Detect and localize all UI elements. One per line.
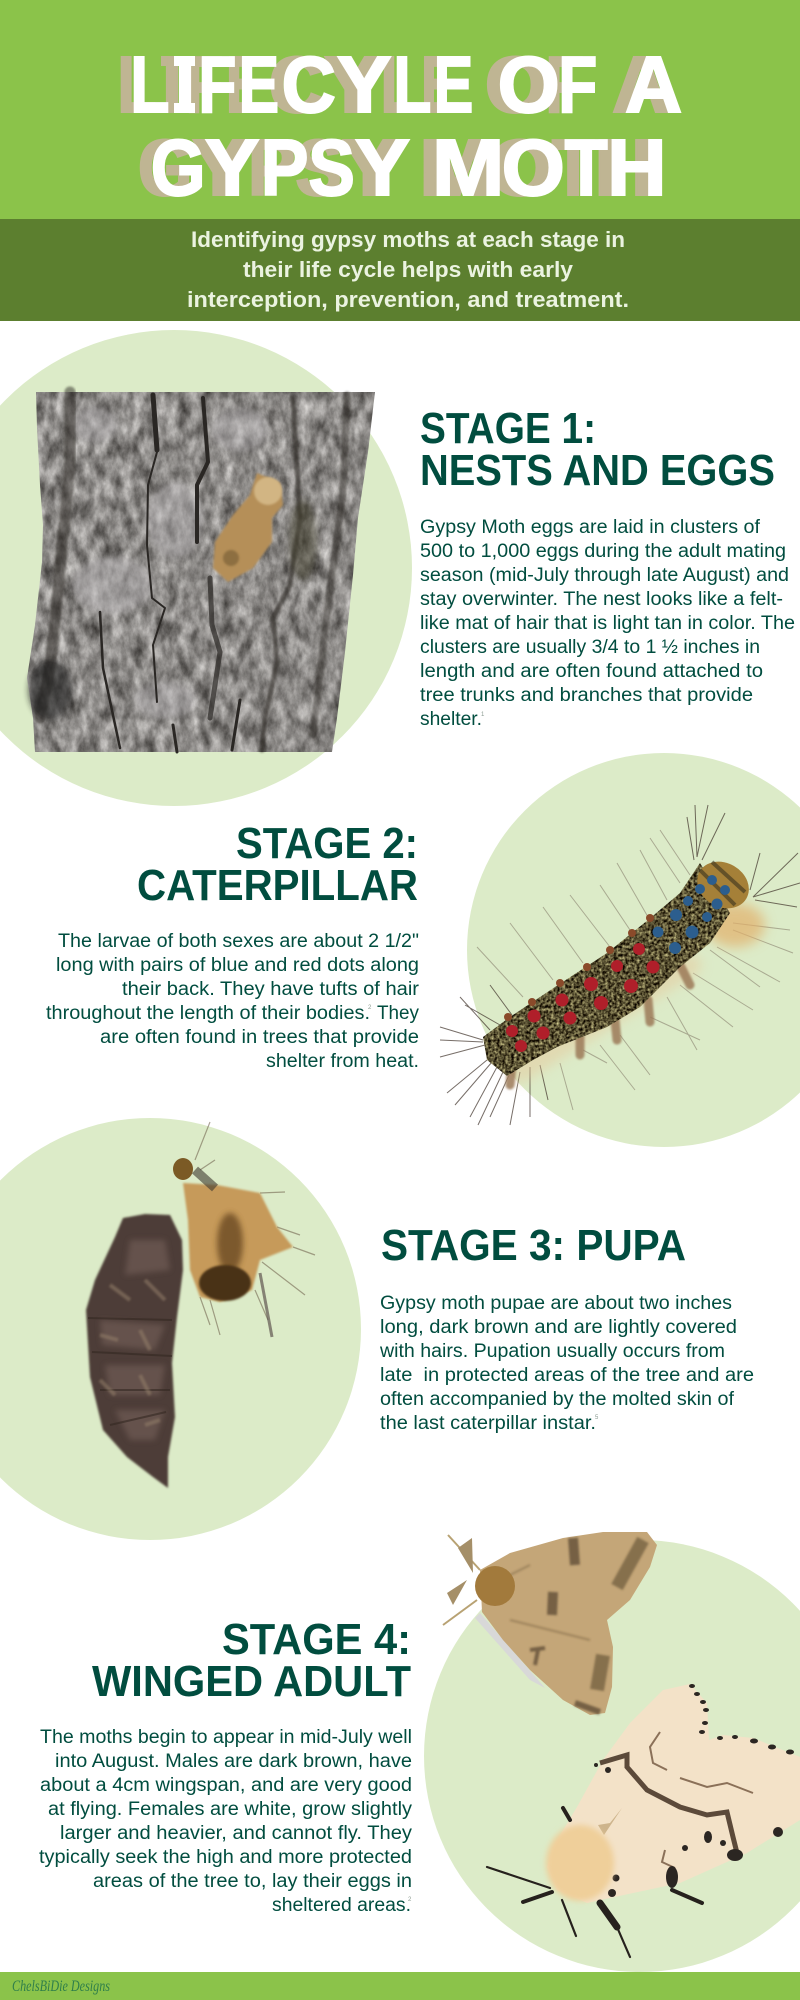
stage 2 heading: CATERPILLAR bbox=[137, 861, 418, 910]
title: A bbox=[625, 40, 682, 129]
pupa body bbox=[86, 1214, 183, 1488]
title: E bbox=[239, 40, 279, 129]
title: L bbox=[117, 40, 156, 129]
stage 2 text: 2 bbox=[368, 1005, 372, 1011]
stage 1 circle bbox=[0, 330, 412, 806]
stage 1 text: clusters are usually 3/4 to 1 ½ inches in bbox=[420, 637, 760, 658]
caterpillar head bbox=[689, 852, 757, 918]
photo: brown male moth bbox=[443, 1532, 657, 1715]
stage 2 text: The larvae of both sexes are about 2 1/2" bbox=[58, 931, 419, 952]
title: S bbox=[308, 123, 355, 212]
stage 3 text: with hairs. Pupation usually occurs from bbox=[379, 1341, 725, 1362]
stage 3 text: 5 bbox=[595, 1415, 599, 1421]
caterpillar dark hairs bbox=[440, 805, 800, 1125]
stage 2 circle bbox=[467, 753, 800, 1147]
stage 4 text: about a 4cm wingspan, and are very good bbox=[40, 1775, 412, 1796]
subtitle band bbox=[0, 219, 800, 321]
title: S bbox=[295, 123, 342, 212]
stage 4 text: typically seek the high and more protected bbox=[39, 1847, 412, 1868]
photo: tree trunk with egg mass bbox=[27, 392, 375, 752]
caterpillar red dots bbox=[506, 943, 660, 1052]
title: E bbox=[226, 40, 266, 129]
subtitle: Identifying gypsy moths at each stage in bbox=[191, 227, 625, 252]
title: O bbox=[489, 123, 552, 212]
stage 3 heading: STAGE 3: PUPA bbox=[381, 1221, 686, 1270]
stage 2 text: long with pairs of blue and red dots along bbox=[56, 955, 419, 976]
header band bbox=[0, 0, 800, 219]
caterpillar pale long hairs bbox=[477, 830, 793, 1110]
stage 4 text: The moths begin to appear in mid-July well bbox=[40, 1727, 412, 1748]
stage 4 circle bbox=[424, 1540, 800, 1972]
title: G bbox=[151, 123, 206, 212]
title: L bbox=[380, 40, 418, 129]
title: L bbox=[393, 40, 431, 129]
stage 2 text bbox=[46, 931, 420, 1072]
stage 1 text bbox=[420, 517, 795, 730]
egg mass bbox=[213, 473, 283, 582]
stage 3 text: often accompanied by the molted skin of bbox=[380, 1389, 735, 1410]
title: F bbox=[558, 40, 597, 129]
stage 1 text: length and are often found attached to bbox=[420, 661, 763, 682]
stage 2 text: are often found in trees that provide bbox=[100, 1027, 419, 1048]
stage 3 text: the last caterpillar instar. bbox=[380, 1413, 596, 1434]
stage 1 text: 1 bbox=[481, 712, 485, 718]
stage 2 heading: STAGE 2: bbox=[236, 819, 418, 868]
stage 4 text bbox=[39, 1727, 413, 1916]
title: O bbox=[498, 40, 560, 129]
title: O bbox=[502, 123, 565, 212]
title: F bbox=[545, 40, 584, 129]
title: T bbox=[565, 123, 608, 212]
stage 2 text: shelter from heat. bbox=[266, 1051, 419, 1072]
panel: stage 3 bbox=[0, 1118, 754, 1540]
photo: caterpillar bbox=[440, 805, 800, 1125]
title: H bbox=[607, 123, 667, 212]
title: F bbox=[198, 40, 236, 129]
caterpillar fringes bbox=[510, 965, 690, 1085]
stage 4 text: at flying. Females are white, grow slightly bbox=[48, 1799, 413, 1820]
title: Y bbox=[355, 123, 410, 212]
stage 4 heading: WINGED ADULT bbox=[92, 1657, 411, 1706]
title: P bbox=[261, 123, 308, 212]
title: Y bbox=[337, 40, 391, 129]
title: H bbox=[594, 123, 654, 212]
title: I bbox=[162, 40, 182, 129]
caterpillar blue dots bbox=[652, 875, 730, 954]
stage 4 text: larger and heavier, and cannot fly. They bbox=[60, 1823, 413, 1844]
stage 4 text: into August. Males are dark brown, have bbox=[55, 1751, 412, 1772]
caterpillar orange halo bbox=[705, 903, 765, 947]
title: O bbox=[485, 40, 547, 129]
subtitle bbox=[187, 227, 629, 312]
signature: ChelsBiDie Designs bbox=[12, 1978, 110, 1995]
stage 1 text: like mat of hair that is light tan in color. The bbox=[420, 613, 795, 634]
title: P bbox=[248, 123, 296, 212]
stage 4 text: areas of the tree to, lay their eggs in bbox=[93, 1871, 412, 1892]
stage 3 text: late in protected areas of the tree and are bbox=[380, 1365, 754, 1386]
panel: stage 1 bbox=[0, 330, 795, 806]
stage 4 text: sheltered areas. bbox=[272, 1895, 411, 1916]
stage 4 text: 2 bbox=[408, 1897, 412, 1903]
title: I bbox=[175, 40, 195, 129]
stage 1 text: stay overwinter. The nest looks like a felt- bbox=[420, 589, 783, 610]
caterpillar body bbox=[483, 863, 730, 1076]
title bbox=[117, 40, 682, 212]
title: Y bbox=[192, 123, 246, 212]
subtitle: their life cycle helps with early bbox=[243, 257, 574, 282]
title: E bbox=[421, 40, 460, 129]
stage 2 text: They bbox=[377, 1003, 419, 1024]
title: F bbox=[185, 40, 223, 129]
title: Y bbox=[342, 123, 397, 212]
stage 1 text: tree trunks and branches that provide bbox=[420, 685, 753, 706]
stage 1 heading bbox=[420, 404, 775, 495]
title: A bbox=[612, 40, 669, 129]
stage 3 text bbox=[379, 1293, 754, 1434]
stage 2 text: throughout the length of their bodies. bbox=[46, 1003, 370, 1024]
molted skin bbox=[183, 1183, 293, 1302]
title: E bbox=[434, 40, 473, 129]
title: C bbox=[268, 40, 323, 129]
photo: white female moth bbox=[487, 1684, 800, 1957]
stage 1 text: shelter. bbox=[420, 709, 482, 730]
stage 1 text: 500 to 1,000 eggs during the adult mating bbox=[420, 541, 786, 562]
stage 3 text: long, dark brown and are lightly covered bbox=[380, 1317, 737, 1338]
stage 1 text: Gypsy Moth eggs are laid in clusters of bbox=[420, 517, 761, 538]
footer band bbox=[0, 1972, 800, 2000]
title: L bbox=[130, 40, 170, 129]
molted skin hairs bbox=[195, 1122, 315, 1335]
title: Y bbox=[205, 123, 259, 212]
stage 4 heading bbox=[92, 1615, 411, 1706]
title: T bbox=[552, 123, 595, 212]
caterpillar knobs bbox=[504, 914, 654, 1021]
title: G bbox=[138, 123, 192, 212]
title: M bbox=[432, 123, 504, 212]
title: Y bbox=[324, 40, 378, 129]
panel: stage 2 bbox=[46, 753, 800, 1147]
title: M bbox=[419, 123, 492, 212]
title: C bbox=[282, 40, 336, 129]
panel: stage 4 bbox=[39, 1532, 800, 1972]
stage 2 heading bbox=[137, 819, 418, 910]
photo: pupa with molted skin bbox=[86, 1122, 315, 1488]
stage 1 heading: STAGE 1: bbox=[420, 404, 596, 453]
stage 4 heading: STAGE 4: bbox=[222, 1615, 411, 1664]
stage 2 text: their back. They have tufts of hair bbox=[122, 979, 420, 1000]
stage 3 text: Gypsy moth pupae are about two inches bbox=[380, 1293, 732, 1314]
subtitle: interception, prevention, and treatment. bbox=[187, 287, 629, 312]
stage 1 text: season (mid-July through late August) and bbox=[420, 565, 789, 586]
stage 3 circle bbox=[0, 1118, 361, 1540]
